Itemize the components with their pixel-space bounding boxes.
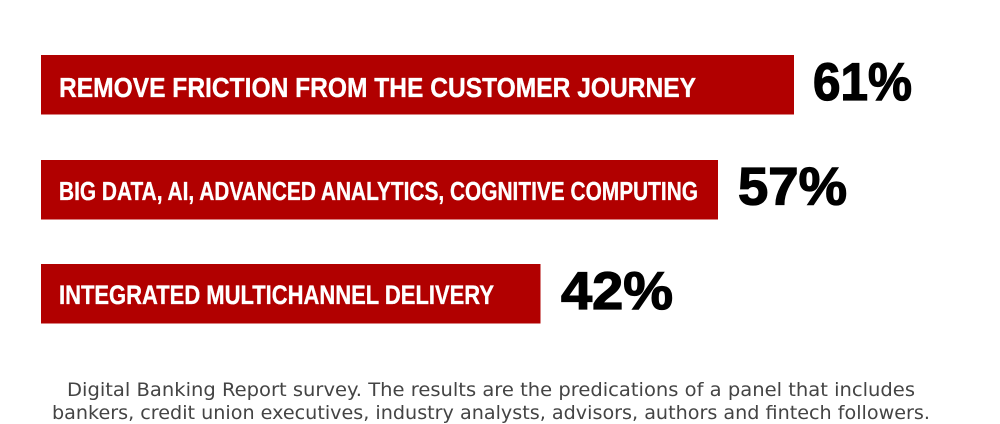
bar label: remove friction: REMOVE FRICTION FROM THE CUSTOMER JOURNEY — [59, 72, 696, 103]
bar row: integrated multichannel 42% — [41, 262, 673, 324]
bar row: big data 57% — [41, 158, 847, 220]
value: 57%: 57% — [738, 158, 847, 216]
bar label: integrated multichannel: INTEGRATED MULTICHANNEL DELIVERY — [59, 280, 494, 310]
bar: 57% — [41, 160, 718, 220]
footnote — [52, 379, 930, 424]
footnote: Digital Banking Report survey. The results are the predications of a panel that includes — [67, 379, 915, 401]
bar label: big data: BIG DATA, AI, ADVANCED ANALYTICS, COGNITIVE COMPUTING — [59, 176, 698, 206]
bar: 42% — [41, 264, 540, 324]
bar row: remove friction 61% — [41, 53, 912, 114]
value: 61%: 61% — [813, 53, 912, 112]
value: 42%: 42% — [561, 262, 673, 321]
footnote: bankers, credit union executives, industry analysts, advisors, authors and fintech followers. — [52, 402, 930, 424]
bar: 61% — [41, 55, 794, 114]
